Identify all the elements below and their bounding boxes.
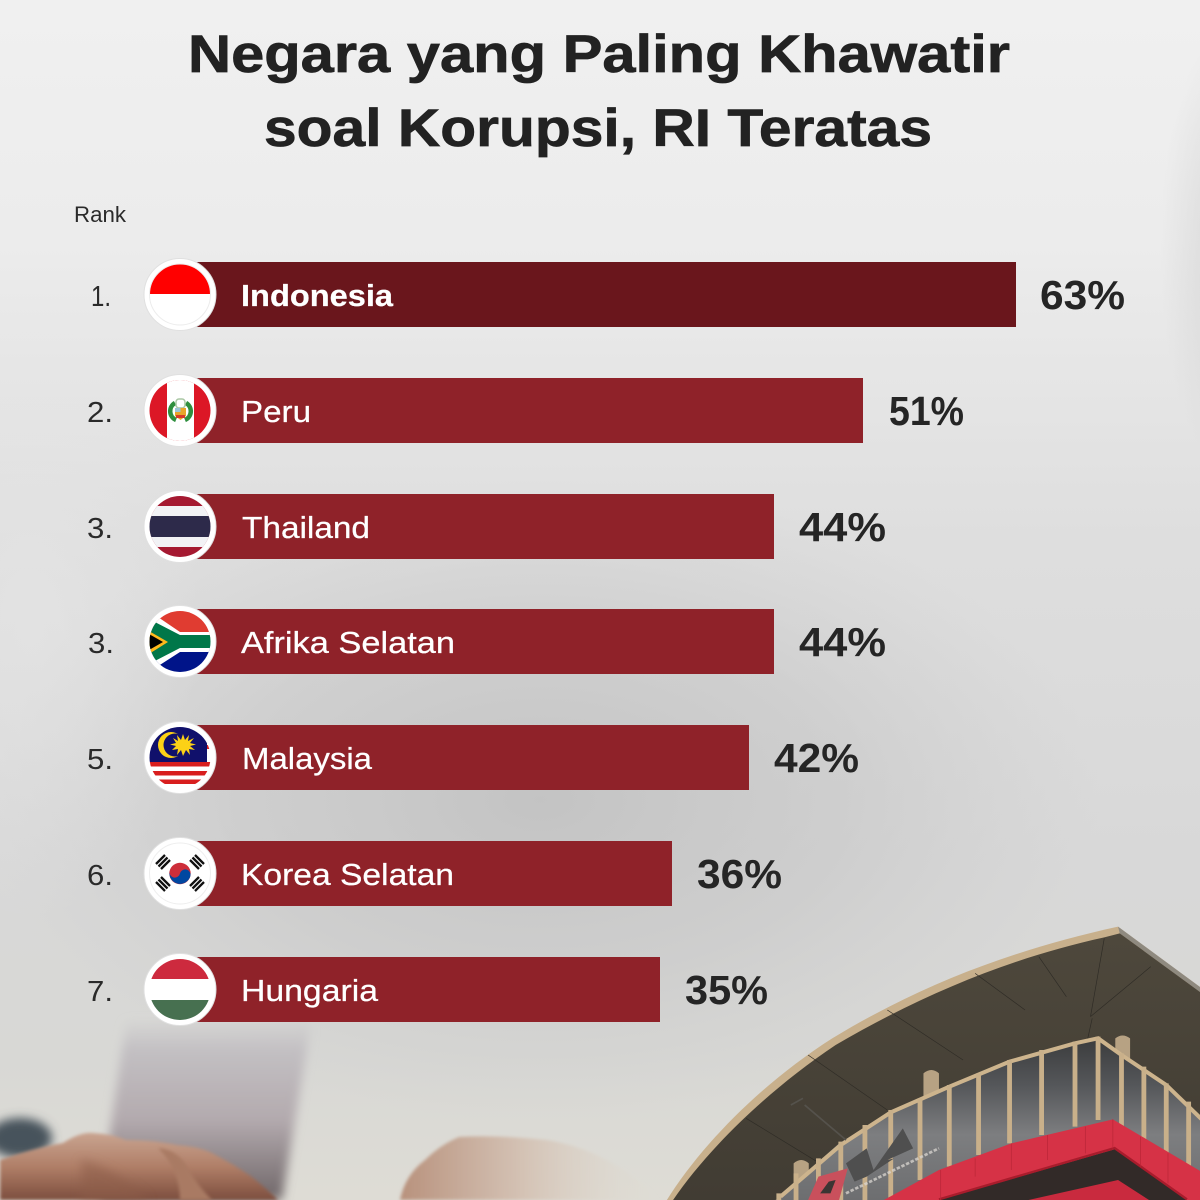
row 6: Korea Selatan 36%: 6.: [87, 860, 113, 892]
row 4: Afrika Selatan 44%: 3.: [88, 628, 114, 660]
row 2: Peru 51%: 51%: [889, 388, 964, 434]
icon: Thailand flag: [144, 490, 216, 562]
row 1: Indonesia 63%: Indonesia: [241, 278, 394, 313]
roof underside: [673, 933, 1200, 1200]
row 7: Hungaria 35%: Hungaria: [241, 973, 379, 1008]
row 4: Afrika Selatan 44%: Afrika Selatan: [241, 625, 455, 660]
title: [188, 25, 1010, 158]
row 4: Afrika Selatan 44%: 44%: [799, 619, 886, 665]
background photo: blurred laptop and hands: [0, 1022, 660, 1200]
row 6: Korea Selatan 36%: Korea Selatan: [241, 857, 454, 892]
roof edge: [667, 927, 1200, 1200]
row 5: Malaysia 42%: 5.: [87, 744, 113, 776]
icon: star: [170, 734, 196, 756]
title: Negara yang Paling Khawatir: [188, 25, 1010, 84]
row 3: Thailand 44%: 3.: [87, 513, 113, 545]
row 2: Peru 51%: 2.: [87, 397, 113, 429]
mullions: [779, 1037, 1189, 1200]
icon: Hungary flag: [144, 954, 216, 1026]
row 1: Indonesia 63%: 63%: [1040, 272, 1125, 318]
rank column heading: Rank: [74, 202, 127, 227]
row 3: Thailand 44%: 44%: [799, 504, 886, 550]
row 1: Indonesia 63%: [91, 258, 1125, 330]
row 1: Indonesia 63%: 1.: [91, 281, 111, 313]
row 6: Korea Selatan 36%: 36%: [697, 851, 782, 897]
row 2: Peru 51%: Peru: [241, 394, 311, 429]
icon: Peru flag: [144, 374, 216, 446]
row 5: Malaysia 42%: [87, 722, 859, 794]
right roof edge: [1118, 927, 1200, 995]
row 5: Malaysia 42%: Malaysia: [242, 741, 373, 776]
row 7: Hungaria 35%: 7.: [87, 976, 113, 1008]
row 3: Thailand 44%: Thailand: [242, 510, 370, 545]
row 6: Korea Selatan 36%: [87, 838, 782, 910]
lamp arm: [791, 1098, 846, 1140]
glass band: [775, 1037, 1200, 1200]
cream rail: [781, 1038, 1200, 1197]
KPK sign: [808, 1128, 939, 1200]
title: soal Korupsi, RI Teratas: [264, 99, 932, 158]
icon: South Africa flag: [144, 606, 216, 678]
icon: Malaysia flag: [144, 722, 216, 794]
icon: Indonesia flag: [144, 258, 216, 330]
row 3: Thailand 44%: [87, 490, 886, 562]
row 4: Afrika Selatan 44%: [88, 606, 886, 678]
red facade: [884, 1119, 1200, 1200]
row 7: Hungaria 35%: [87, 954, 768, 1026]
row 2: Peru 51%: [87, 374, 964, 446]
round columns: [794, 1035, 1130, 1200]
icon: South Korea flag: [144, 838, 216, 910]
background photo: KPK building: [667, 927, 1200, 1200]
row 7: Hungaria 35%: 35%: [685, 967, 768, 1013]
row 5: Malaysia 42%: 42%: [774, 735, 859, 781]
